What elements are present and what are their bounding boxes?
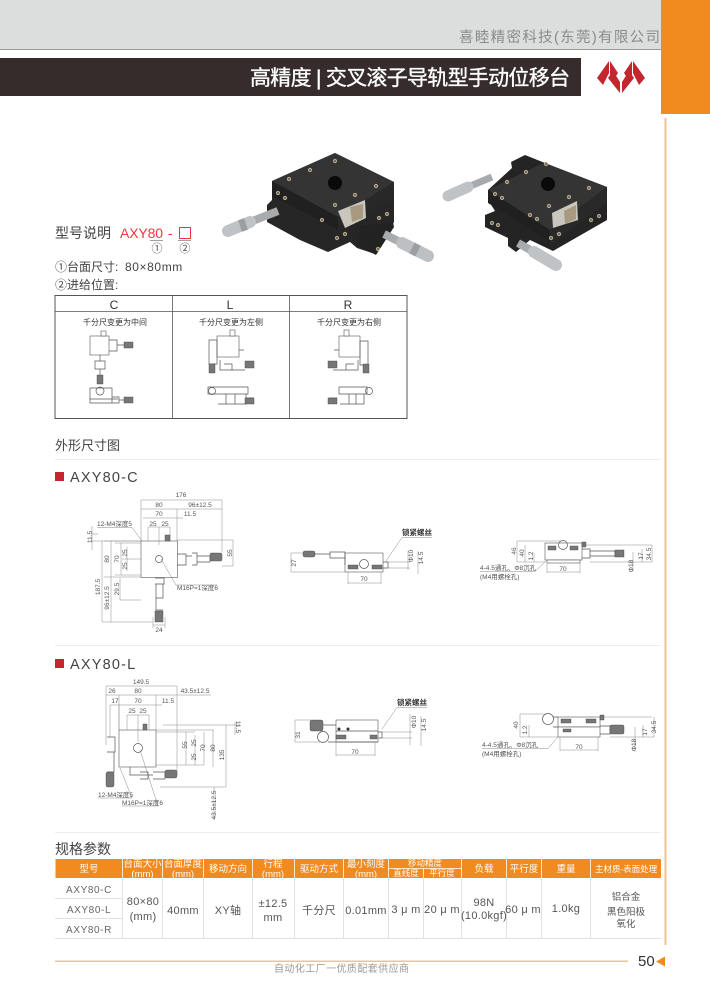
- table body: 20 μ m: [424, 904, 460, 916]
- table header: 驱动方式: [300, 863, 338, 875]
- table body: (10.0kgf): [461, 910, 507, 922]
- table body: 黑色阳极: [607, 906, 645, 918]
- right margin line: [664, 118, 666, 945]
- drawing: AXY80-C side view: 锁紧螺丝: [402, 527, 432, 537]
- table header: [56, 858, 661, 880]
- drawing: AXY80-C side view: 14.5: [418, 551, 425, 564]
- drawing: AXY80-C top view: 25: [149, 521, 157, 528]
- feed position table: 千分尺变更为中间: [83, 317, 147, 327]
- table body: 0.01mm: [345, 905, 387, 917]
- drawing: AXY80-L top view: 25: [139, 708, 147, 715]
- specification table: [55, 858, 661, 938]
- drawing: AXY80-C top view: 70: [114, 555, 121, 563]
- company name: 喜睦精密科技(东莞)有限公司: [459, 29, 660, 46]
- drawing: AXY80-L side view: 锁紧螺丝: [397, 697, 427, 707]
- table header: (mm): [355, 869, 377, 880]
- table body: AXY80-L: [67, 905, 111, 916]
- drawing: AXY80-L top view: 70: [200, 744, 207, 752]
- drawing: AXY80-C end view: 4-4.5通孔、Φ8沉孔: [480, 563, 537, 572]
- drawing: AXY80-L top view: 25: [191, 753, 198, 761]
- drawing: AXY80-C top view: [87, 492, 234, 634]
- drawing: AXY80-C end view: (M4用螺栓孔): [480, 572, 519, 581]
- drawing: AXY80-C top view: 80: [104, 555, 111, 563]
- table body: mm: [264, 912, 282, 924]
- table body: [55, 878, 661, 938]
- table body: 40mm: [167, 905, 199, 917]
- micrometer: rear top: [448, 177, 492, 196]
- table body: ±12.5: [259, 898, 287, 910]
- drawing: AXY80-C top view: 176: [176, 492, 187, 499]
- heading: AXY80-C: AXY80-C: [70, 470, 139, 486]
- drawing: AXY80-C top view: 96±12.5: [104, 586, 111, 610]
- feed position table: R: [344, 298, 353, 312]
- footer slogan: 自动化工厂一优质配套供应商: [274, 962, 409, 975]
- table header: 直线度: [393, 868, 419, 878]
- drawing: AXY80-L end view: (M4用螺栓孔): [482, 749, 521, 758]
- drawing: AXY80-C top view: 25: [161, 521, 169, 528]
- drawing: AXY80-C top view: 187.5: [95, 578, 102, 595]
- heading: AXY80-L: AXY80-L: [70, 657, 136, 673]
- table header: 最小刻度: [347, 858, 385, 870]
- table body: 1.0kg: [552, 903, 580, 915]
- table header: 负载: [474, 863, 494, 875]
- drawing: AXY80-L end view: 40: [513, 721, 520, 729]
- drawing: AXY80-C top view: 29.5: [114, 582, 121, 595]
- option: table size: ①台面尺寸:: [55, 260, 118, 274]
- drawing: AXY80-C top view: 24: [155, 627, 163, 634]
- drawing: AXY80-L top view: 149.5: [133, 679, 150, 686]
- table body: 98N: [473, 897, 495, 909]
- model description: ②: [180, 242, 190, 255]
- table header: 移动精度: [408, 858, 442, 868]
- table body: 铝合金: [612, 891, 641, 903]
- footer rule: [55, 960, 628, 962]
- drawing: AXY80-C side view: 70: [360, 576, 368, 583]
- drawing: AXY80-L top view: 55: [182, 741, 189, 749]
- table header: (mm): [172, 869, 194, 880]
- product photo: stage, rear view: [448, 155, 607, 265]
- drawing: AXY80-C end view: 46: [511, 547, 518, 555]
- drawing: AXY80-C top view: 80: [155, 502, 163, 509]
- drawing: AXY80-C top view: 11.5: [184, 511, 196, 518]
- drawing: AXY80-L top view: 135: [219, 749, 226, 760]
- drawing: AXY80-L top view: M16P=1深度6: [122, 798, 163, 807]
- drawing: AXY80-C side view: 27: [291, 559, 298, 567]
- drawing: AXY80-C end view: 70: [559, 566, 567, 573]
- table body: 千分尺: [302, 904, 336, 917]
- table body: XY轴: [215, 903, 241, 917]
- drawing: AXY80-L end view: [482, 714, 658, 758]
- drawing: AXY80-C top view: 25: [122, 562, 129, 570]
- thumbnail: position C: [90, 331, 133, 403]
- drawing: AXY80-L side view: Φ10: [411, 715, 418, 728]
- table header: 平行度: [510, 863, 539, 875]
- drawing: AXY80-L top view: 12-M4深度5: [98, 790, 133, 799]
- drawing: AXY80-L top view: 43.5±12.5: [181, 688, 210, 695]
- drawing: AXY80-L end view: 17: [642, 728, 649, 736]
- table body: 氧化: [616, 918, 636, 930]
- model description: [55, 225, 191, 255]
- feed position table: L: [227, 298, 234, 312]
- drawing: AXY80-L end view: 4-4.5通孔、Φ8沉孔: [482, 740, 539, 749]
- drawing: AXY80-C end view: Φ18: [628, 559, 635, 572]
- drawing: AXY80-C top view: 11.5: [87, 531, 94, 543]
- heading: outline dimensions: 外形尺寸图: [55, 438, 120, 453]
- feed position table: 千分尺变更为右侧: [317, 317, 381, 327]
- table body: (mm): [130, 911, 156, 923]
- product photo: stage, front view: [228, 153, 428, 256]
- drawing: AXY80-L end view: Φ18: [631, 738, 638, 751]
- drawing: AXY80-C side view: [291, 527, 432, 584]
- drawing: AXY80-C end view: 34.5: [646, 547, 653, 560]
- table body: 80×80: [127, 896, 159, 908]
- table header: (mm): [131, 869, 154, 880]
- icon: company logo: [597, 61, 645, 93]
- orange corner tab: [661, 0, 710, 114]
- drawing: AXY80-L side view: 14.5: [421, 718, 428, 731]
- drawing: AXY80-L end view: 1.2: [522, 725, 529, 735]
- drawing: AXY80-C top view: 70: [155, 511, 163, 518]
- table header: 台面厚度: [164, 858, 202, 870]
- drawing: AXY80-C end view: 40: [519, 549, 526, 557]
- table body: 60 μ m: [505, 904, 541, 916]
- table header: 主材质-表面处理: [595, 864, 658, 874]
- drawing: AXY80-L end view: 70: [575, 744, 583, 751]
- icon: page arrow: [656, 956, 665, 966]
- drawing: AXY80-L top view: 17: [111, 698, 119, 705]
- table header: 平行度: [429, 868, 455, 878]
- drawing: AXY80-L top view: 11.5: [234, 721, 241, 733]
- drawing: AXY80-L top view: [98, 679, 241, 820]
- feed position table: [55, 295, 407, 418]
- drawing: AXY80-C top view: 96±12.5: [188, 502, 212, 509]
- table header: 型号: [79, 864, 99, 875]
- drawing: AXY80-C top view: 55: [227, 549, 234, 557]
- drawing: AXY80-L side view: [295, 697, 428, 756]
- drawing: AXY80-C top view: 25: [122, 549, 129, 557]
- drawing: AXY80-L side view: 31: [295, 731, 302, 739]
- title bar: [0, 58, 581, 96]
- option: table size: 80×80mm: [125, 260, 183, 274]
- feed position table: C: [110, 298, 119, 312]
- table body: 3 μ m: [391, 904, 421, 916]
- heading: specifications: 规格参数: [55, 841, 111, 857]
- table header: 移动方向: [209, 863, 247, 875]
- table body: AXY80-R: [66, 925, 112, 936]
- model description: -: [168, 225, 173, 241]
- model description: 型号说明: [55, 225, 111, 241]
- micrometer: front left: [228, 211, 278, 231]
- drawing: AXY80-L top view: 11.5: [162, 698, 174, 705]
- micrometer: front right: [384, 234, 428, 256]
- drawing: AXY80-L top view: 26: [108, 688, 116, 695]
- drawing: AXY80-C end view: 17: [638, 552, 645, 560]
- drawing: AXY80-C end view: [480, 540, 653, 581]
- micrometer: rear bottom: [518, 243, 556, 265]
- model description: AXY80: [120, 225, 163, 241]
- feed position table: 千分尺变更为左侧: [199, 317, 263, 327]
- page number: 50: [638, 953, 655, 970]
- table header: 重量: [556, 863, 576, 875]
- option: feed position: ②进给位置:: [55, 277, 118, 292]
- drawing: AXY80-C top view: M16P=1深度6: [177, 583, 218, 592]
- drawing: AXY80-C top view: 12-M4深度5: [97, 519, 132, 528]
- model description: ①: [152, 242, 162, 255]
- drawing: AXY80-C end view: 1.2: [528, 551, 535, 561]
- drawing: AXY80-L top view: 43.5±12.5: [211, 790, 218, 819]
- header band: [0, 0, 661, 50]
- title bar: 高精度 | 交叉滚子导轨型手动位移台: [250, 67, 570, 90]
- drawing: AXY80-L side view: 70: [351, 749, 359, 756]
- drawing: AXY80-L top view: 25: [191, 739, 198, 747]
- drawing: AXY80-L top view: 80: [134, 688, 142, 695]
- table header: (mm): [262, 869, 284, 880]
- drawing: AXY80-C side view: Φ10: [408, 549, 415, 562]
- thumbnail: position L: [208, 330, 254, 404]
- drawing: AXY80-L top view: 70: [134, 698, 142, 705]
- table header: 台面大小: [123, 858, 162, 870]
- drawing: AXY80-L top view: 25: [128, 708, 136, 715]
- thumbnail: position R: [328, 330, 372, 404]
- table header: 行程: [263, 858, 283, 870]
- table body: AXY80-C: [66, 885, 112, 896]
- drawing: AXY80-L top view: 80: [210, 744, 217, 752]
- drawing: AXY80-L end view: 34.5: [651, 720, 658, 733]
